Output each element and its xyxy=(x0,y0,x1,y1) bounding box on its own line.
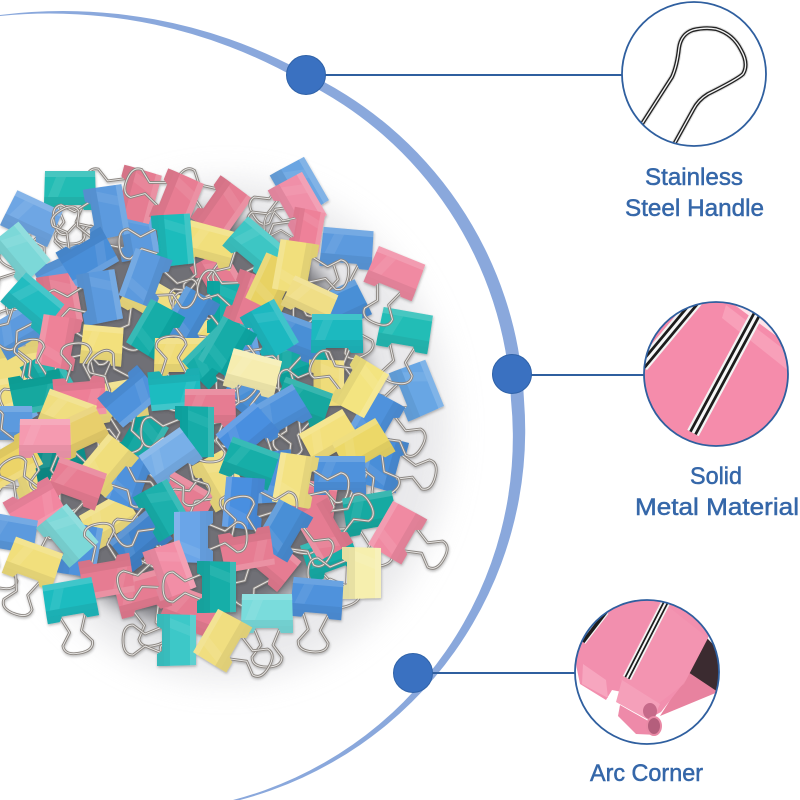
leader line 3 xyxy=(431,672,576,674)
label: solid metal material: Metal Material xyxy=(635,494,799,521)
curved blue arc xyxy=(0,11,525,800)
label: stainless steel handle xyxy=(625,164,764,222)
label: stainless steel handle: Steel Handle xyxy=(625,195,764,222)
detail circle: arc corner xyxy=(574,599,720,745)
label: solid metal material: Solid xyxy=(690,463,742,490)
node dot 3 xyxy=(394,654,432,692)
pile shadow xyxy=(0,180,450,680)
detail circle: solid metal material xyxy=(642,300,800,446)
leader line 2 xyxy=(530,374,645,376)
filler clips behind xyxy=(0,248,435,670)
label: solid metal material xyxy=(635,463,799,521)
clips xyxy=(0,156,457,690)
label: stainless steel handle: Stainless xyxy=(645,164,743,191)
leader line 1 xyxy=(324,74,623,76)
node dot 2 xyxy=(492,354,532,394)
node dot 1 xyxy=(286,56,326,94)
detail circle: stainless steel handle xyxy=(622,2,766,148)
clip pile photo xyxy=(0,156,457,690)
label: arc corner: Arc Corner xyxy=(590,760,703,787)
